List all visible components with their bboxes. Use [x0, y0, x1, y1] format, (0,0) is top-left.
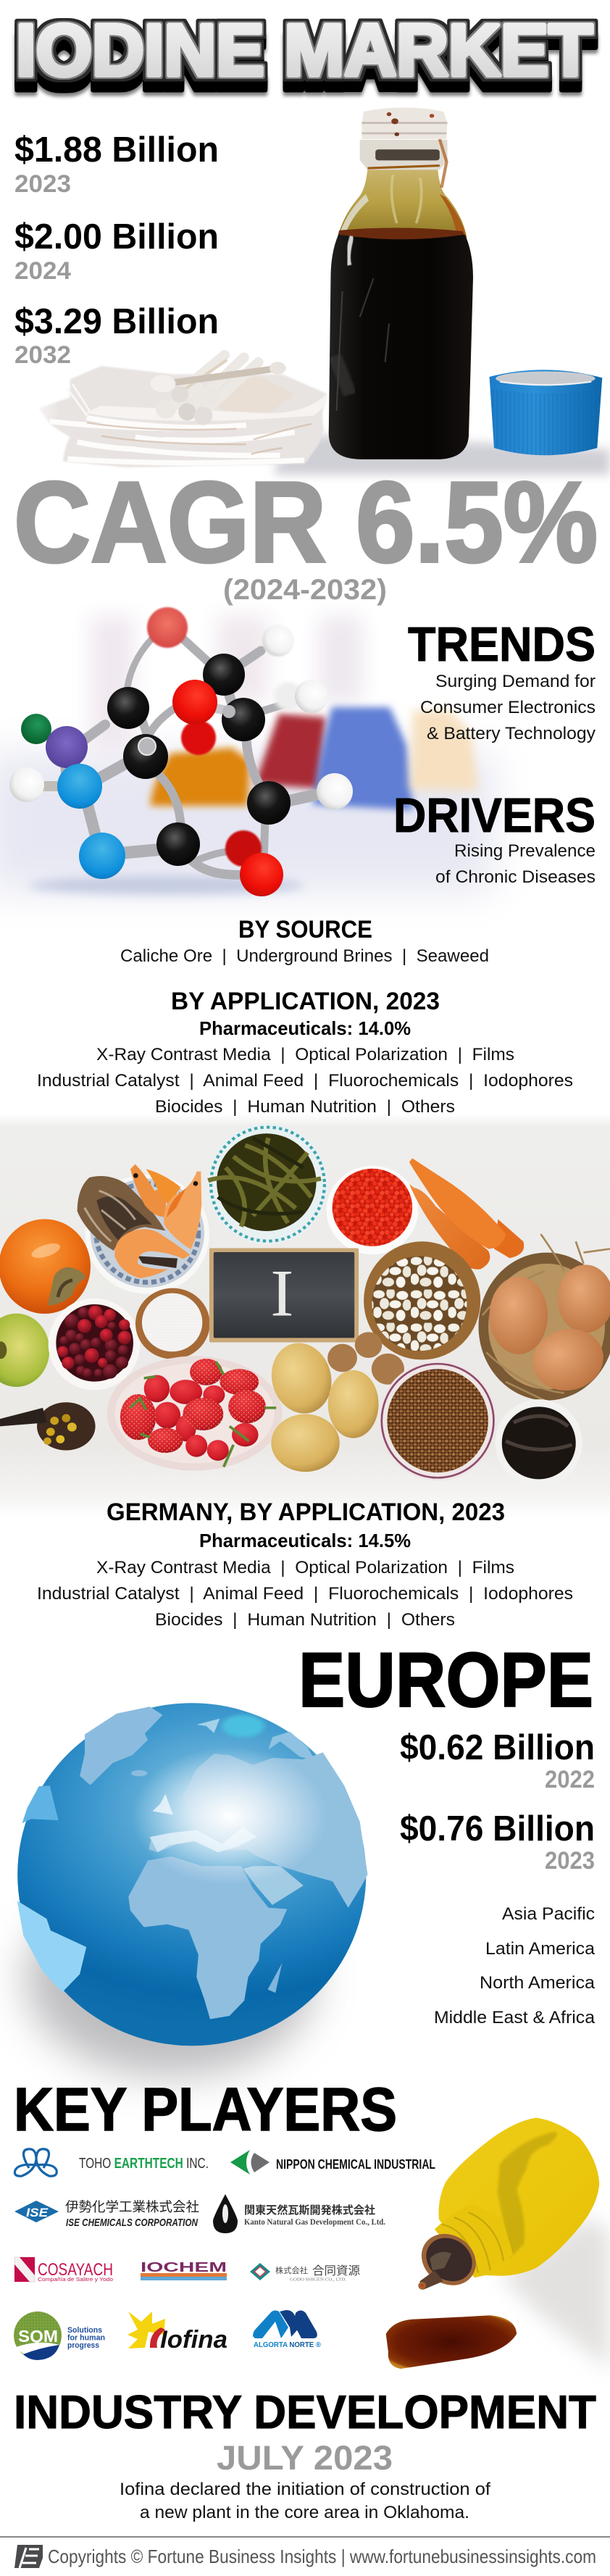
cranberry bowl	[49, 1299, 140, 1390]
salt bowl	[135, 1288, 210, 1359]
spoon with capsules	[0, 1402, 96, 1451]
sphere: white top right	[262, 625, 294, 656]
molecule bonds	[40, 630, 322, 875]
globe shadow	[25, 1880, 315, 2076]
title: IODINE MARKET	[16, 10, 593, 91]
egg right	[558, 1264, 610, 1333]
logo: godo shigen icon	[250, 2263, 270, 2280]
logo: kanto natural gas: Kanto Natural Gas Development Co., Ltd.	[244, 2217, 385, 2227]
bottle neck ribs	[435, 2204, 513, 2277]
africa	[128, 1856, 287, 2019]
madagascar	[267, 1963, 282, 1993]
market value stats	[14, 130, 219, 369]
seaweed bowl	[207, 1124, 328, 1244]
potatoes	[265, 1338, 379, 1472]
persimmon	[0, 1219, 91, 1314]
sphere: red front	[172, 680, 217, 725]
heading: drivers: DRIVERS	[393, 788, 596, 843]
heading: germany: GERMANY, BY APPLICATION, 2023	[106, 1499, 505, 1526]
logo: nippon chemical icon	[230, 2150, 270, 2175]
sphere: black upper right	[222, 698, 265, 741]
roe bowl	[327, 1166, 418, 1254]
heading: trends: TRENDS	[408, 617, 596, 672]
sphere: black center	[123, 734, 168, 779]
logo: algorta norte: ALGORTA NORTE ®	[254, 2341, 321, 2349]
logo: cosayach icon	[14, 2257, 35, 2282]
CAGR headline	[14, 459, 598, 606]
united kingdom	[153, 1794, 173, 1814]
other regions list: Middle East & Africa	[434, 2008, 596, 2027]
panel: trends	[408, 617, 596, 743]
chalkboard with iodine symbol	[209, 1248, 359, 1343]
beans bowl	[364, 1241, 480, 1360]
panel: key player logos	[14, 2149, 435, 2360]
logo: iochem: IOCHEM	[141, 2260, 227, 2275]
other regions list: Asia Pacific	[502, 1904, 595, 1924]
green apple	[0, 1314, 49, 1387]
panel: industry development	[14, 2385, 596, 2522]
panel: drivers	[393, 788, 596, 887]
oyster	[78, 1176, 165, 1251]
other regions list: Latin America	[485, 1939, 596, 1959]
development description: Iofina declared the initiation of construction of	[120, 2480, 490, 2499]
sphere: white left	[9, 767, 44, 802]
image: globe	[17, 1703, 367, 2046]
seafood bowl	[78, 1164, 209, 1294]
arabia	[243, 1866, 304, 1905]
body shading	[498, 2132, 557, 2259]
image: iodine puddle	[386, 2315, 517, 2369]
sphere: black left	[107, 687, 149, 729]
logo: sqm tagline	[67, 2326, 105, 2350]
logo: iofina	[128, 2312, 227, 2354]
continents	[17, 1706, 367, 2019]
logo: cosayach: COSAYACH	[38, 2260, 113, 2280]
liquid surface	[337, 228, 466, 241]
trends text	[420, 672, 596, 743]
sphere: red dim	[225, 830, 262, 867]
iceland	[131, 1770, 148, 1776]
iberia and europe highlight	[150, 1827, 256, 1852]
heading: by source: BY SOURCE	[238, 916, 372, 943]
application list: Industrial Catalyst | Animal Feed | Fluorochemicals | Iodophores	[37, 1071, 573, 1091]
date: JULY 2023	[217, 2438, 393, 2477]
logo: godo shigen: 合同資源	[312, 2264, 360, 2277]
logo: ise diamond: ISE	[26, 2206, 49, 2219]
image: iodine bottle	[329, 107, 473, 459]
walnuts	[327, 1332, 404, 1385]
other regions list	[434, 1904, 596, 2027]
logo: godo shigen: 株式会社	[275, 2265, 308, 2275]
footer	[14, 2545, 596, 2568]
logo: cosayach: Compañía de Salitre y Yodo	[38, 2276, 113, 2283]
logo: ise chemicals: ISE CHEMICALS CORPORATION	[66, 2217, 199, 2229]
logo: algorta norte	[253, 2310, 321, 2349]
stat 2032 year: 2032	[14, 341, 71, 369]
bottle thread top	[362, 107, 448, 139]
greenland	[80, 1706, 162, 1785]
image: molecule model	[9, 607, 353, 896]
forecast period: (2024-2032)	[223, 574, 387, 606]
ocean sphere	[17, 1703, 366, 2046]
sphere: black right	[247, 781, 291, 825]
image: gauze and cotton swabs	[29, 355, 327, 471]
europe value 2023: $0.76 Billion	[400, 1809, 595, 1848]
gauze stack	[29, 357, 327, 471]
panel: by application	[37, 988, 573, 1117]
logo: sqm tagline: for human	[67, 2333, 105, 2342]
eurasia	[149, 1752, 367, 1908]
panel: germany by application	[37, 1499, 573, 1630]
svalbard	[196, 1719, 220, 1733]
egg left	[490, 1277, 548, 1354]
germany application list	[37, 1558, 573, 1630]
sphere: white right upper	[295, 680, 328, 713]
sphere: green	[21, 714, 51, 744]
year 2022: 2022	[545, 1766, 595, 1793]
sphere: black top	[203, 654, 245, 696]
dark liquid body	[329, 235, 473, 459]
north america	[22, 1785, 59, 1823]
sphere: blue bottom	[79, 833, 125, 879]
panel: europe	[298, 1636, 596, 2027]
logo: toho earthtech: TOHO EARTHTECH INC.	[79, 2156, 209, 2172]
stat 2023 year: 2023	[14, 170, 71, 198]
logo: kanto natural gas: 関東天然瓦斯開発株式会社	[244, 2204, 375, 2217]
germany application list: X-Ray Contrast Media | Optical Polarization | Films	[96, 1558, 514, 1577]
logo: sqm badge	[14, 2312, 62, 2360]
other regions list: North America	[480, 1973, 596, 1993]
strawberry plate	[107, 1356, 282, 1471]
stat 2024 year: 2024	[14, 257, 71, 285]
application list	[37, 1045, 573, 1117]
trends text: Surging Demand for	[435, 672, 596, 691]
image: iodine-rich foods	[0, 1114, 610, 1518]
sphere: white right	[317, 773, 353, 809]
year 2023: 2023	[545, 1847, 595, 1875]
source list: Caliche Ore | Underground Brines | Seaweed	[120, 946, 489, 966]
sunlight highlight	[133, 1747, 327, 1885]
bottle shoulder with olive glass	[338, 168, 467, 238]
heading: industry development: INDUSTRY DEVELOPMENT	[14, 2385, 596, 2438]
logo: iofina: Iofina	[160, 2326, 227, 2354]
raisin bowl	[496, 1399, 582, 1487]
shadow under bottle and gauze	[275, 435, 610, 475]
nozzle interior	[418, 2229, 480, 2290]
buckwheat bowl	[379, 1361, 497, 1480]
panel: by source	[120, 916, 489, 966]
shrimp bottom	[138, 1256, 177, 1268]
application list: Biocides | Human Nutrition | Others	[155, 1097, 455, 1117]
trends text: Consumer Electronics	[420, 698, 596, 717]
nozzle tip	[419, 2270, 443, 2290]
logo: kanto drop	[213, 2194, 238, 2233]
germany application list: Industrial Catalyst | Animal Feed | Fluorochemicals | Iodophores	[37, 1584, 573, 1604]
application list: X-Ray Contrast Media | Optical Polarization | Films	[96, 1045, 514, 1064]
bottle shadow	[500, 2217, 610, 2369]
sphere: red bottom	[240, 853, 283, 896]
egg bottom	[524, 1320, 610, 1400]
logo: sqm badge: SQM	[18, 2327, 58, 2346]
bottle neck	[360, 140, 448, 170]
sphere: pink top	[147, 607, 188, 648]
logo: godo shigen	[275, 2264, 360, 2283]
germany application list: Biocides | Human Nutrition | Others	[155, 1610, 455, 1630]
logo: ise chemicals	[65, 2199, 199, 2229]
pharmaceuticals share: Pharmaceuticals: 14.0%	[199, 1017, 411, 1039]
background: blurred lab flasks	[0, 616, 493, 895]
logo: kanto natural gas	[244, 2204, 385, 2227]
nest with eggs	[479, 1234, 610, 1401]
shrimp top left	[130, 1164, 167, 1217]
image: blue bottle cap	[490, 370, 602, 455]
cotton swabs	[151, 355, 286, 425]
europe value 2022: $0.62 Billion	[400, 1728, 595, 1767]
south america	[17, 1901, 86, 1992]
sphere: black bottom	[156, 822, 200, 866]
carrots	[409, 1158, 524, 1270]
development description: a new plant in the core area in Oklahoma.	[140, 2503, 469, 2522]
sphere: faded white	[274, 682, 303, 711]
heading: key players: KEY PLAYERS	[14, 2075, 397, 2143]
sphere: red behind	[181, 720, 216, 755]
drivers text	[435, 841, 596, 887]
bottle body	[439, 2118, 599, 2276]
logo: sqm tagline: progress	[67, 2341, 99, 2350]
drivers text: Rising Prevalence	[454, 841, 596, 861]
pharmaceuticals share germany: Pharmaceuticals: 14.5%	[199, 1530, 411, 1551]
stat 2023 value: $1.88 Billion	[14, 130, 219, 170]
nozzle rim	[411, 2223, 486, 2296]
logo: godo shigen: GODO SHIGEN CO., LTD.	[290, 2277, 346, 2283]
stat 2032 value: $3.29 Billion	[14, 302, 219, 341]
image: yellow dropper bottle	[411, 2118, 599, 2296]
heading: by application: BY APPLICATION, 2023	[171, 988, 440, 1015]
development description	[120, 2480, 490, 2522]
sphere: blue left	[57, 764, 102, 809]
novaya zemlya and arctic	[269, 1732, 315, 1761]
logo: nippon chemical industrial: NIPPON CHEMICAL INDUSTRIAL	[276, 2157, 435, 2172]
sphere: purple	[46, 726, 88, 768]
icon: fortune business insights logo	[14, 2545, 43, 2568]
drivers text: of Chronic Diseases	[435, 867, 596, 887]
chalk letter I: I	[270, 1256, 293, 1330]
logo: ise diamond	[14, 2201, 59, 2222]
logo: ise chemicals: 伊勢化学工業株式会社	[65, 2199, 199, 2214]
trends text: & Battery Technology	[427, 724, 596, 743]
logo: blue knot	[14, 2149, 57, 2176]
shrimp right	[164, 1172, 201, 1249]
stat 2024 value: $2.00 Billion	[14, 217, 219, 257]
shrimp top middle	[146, 1169, 180, 1205]
logo: iochem	[141, 2260, 227, 2280]
logo: sqm tagline: Solutions	[67, 2326, 102, 2335]
